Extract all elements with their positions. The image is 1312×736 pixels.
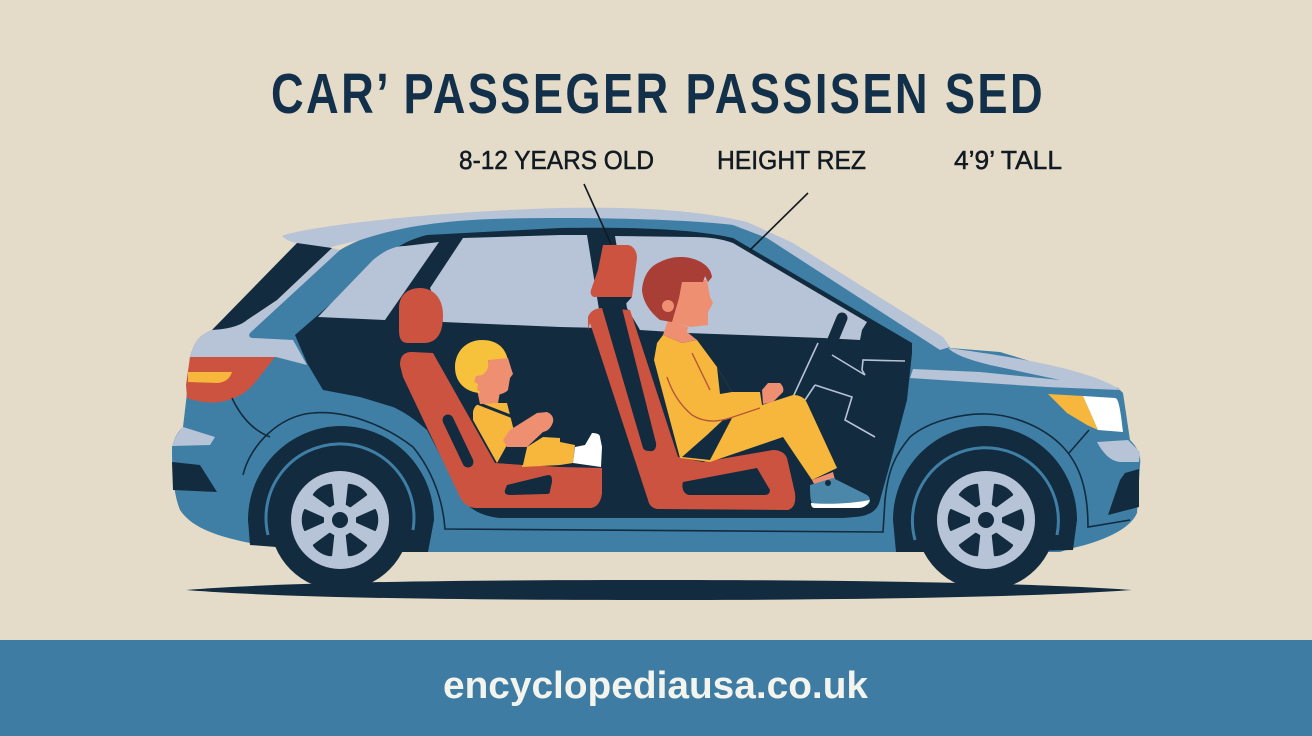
hand: [762, 383, 783, 404]
rear quarter glass: [212, 243, 332, 330]
shoe: [810, 478, 870, 508]
front seat: [588, 245, 795, 510]
rear headrest: [399, 288, 443, 343]
footer banner: [0, 640, 1312, 736]
tail light: [186, 357, 275, 402]
car body: [172, 213, 1140, 552]
older child passenger: [642, 257, 870, 508]
front seat base slot: [682, 468, 770, 495]
pointer line: height: [750, 193, 808, 250]
title: CAR’ PASSEGER PASSISEN SED: [271, 62, 1045, 126]
rear reflector: [172, 462, 217, 492]
neck: [663, 320, 697, 343]
label: tall: 4’9’ TALL: [954, 145, 1062, 175]
child face: [474, 358, 513, 395]
rear child seat: [399, 288, 602, 508]
child passenger: [455, 340, 602, 467]
pointer line: age: [584, 184, 611, 244]
front headrest: [591, 245, 637, 297]
face: [665, 280, 713, 327]
child torso: [473, 403, 520, 463]
hair: [642, 257, 712, 322]
label: height: HEIGHT REZ: [717, 145, 866, 175]
rear seat shell: [400, 352, 602, 508]
roof highlight: [282, 208, 950, 350]
child sock: [573, 433, 602, 467]
headlight: [1048, 394, 1123, 432]
rear bumper trim: [172, 427, 215, 446]
steering wheel: [793, 318, 842, 400]
front wheel: [893, 426, 1077, 590]
front vent: [1108, 469, 1139, 515]
body seam lines: [232, 398, 1130, 532]
front window: [615, 236, 867, 340]
shoulder strap: [717, 367, 732, 394]
clothing lines: [667, 353, 760, 421]
rear side window: [318, 242, 439, 320]
child neck: [477, 390, 500, 404]
child hair: [455, 340, 508, 393]
lap belt: [682, 418, 732, 460]
child legs: [522, 437, 575, 467]
front bumper trim: [1097, 440, 1140, 462]
front seat centre slot: [602, 297, 656, 451]
ground shadow: [186, 580, 1132, 600]
rear wheel: [248, 426, 434, 590]
footer url: encyclopediausa.co.uk: [443, 665, 869, 707]
rear seat base slot: [505, 475, 552, 495]
ankle: [812, 472, 835, 486]
rear seat slot: [448, 420, 468, 462]
door opening interior: [295, 228, 912, 518]
torso and legs: [654, 335, 837, 480]
label: age: 8-12 YEARS OLD: [459, 145, 654, 175]
rear pillar highlight: [190, 243, 340, 365]
front seat shell: [588, 308, 795, 510]
dashboard lines: [805, 355, 905, 437]
hood highlight: [910, 348, 1120, 390]
ear: [662, 300, 674, 312]
child strap: [477, 403, 513, 417]
car: [172, 208, 1140, 590]
middle window: [430, 235, 602, 328]
child arm: [503, 412, 553, 447]
child belt: [497, 445, 527, 465]
